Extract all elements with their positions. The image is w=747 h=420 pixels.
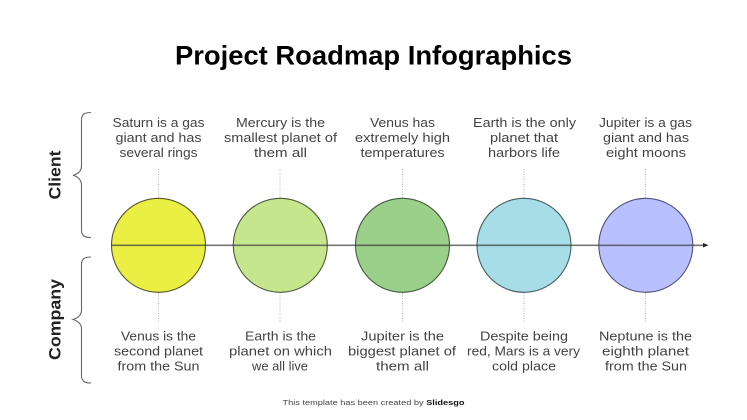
bottom text 1: from the Sun	[118, 358, 200, 374]
top text 3: Venus has	[370, 115, 436, 130]
label: Company: Company	[46, 278, 64, 360]
top text 3: extremely high	[355, 130, 450, 145]
bottom text 4: red, Mars is a very	[467, 344, 581, 358]
circle: periwinkle	[599, 198, 693, 292]
top text 5	[599, 115, 693, 160]
top text 1: Saturn is a gas	[112, 115, 205, 130]
top text 3	[355, 115, 450, 160]
top text 4: planet that	[490, 130, 558, 145]
bottom text 5: eighth planet	[602, 344, 689, 358]
label: Client: Client	[46, 150, 64, 200]
bottom text 1: second planet	[114, 344, 203, 358]
bottom text 2: we all live	[251, 358, 308, 374]
bottom text 1: Venus is the	[121, 328, 196, 344]
bottom text 1	[114, 328, 203, 374]
top text 5: giant and has	[603, 130, 690, 145]
bottom text 3: Jupiter is the	[361, 328, 444, 344]
brace: Company	[73, 257, 91, 383]
top text 4: harbors life	[488, 145, 560, 160]
bottom text 2: planet on which	[229, 344, 332, 358]
bottom text 2	[229, 328, 332, 374]
top text 1	[112, 115, 205, 160]
circle: green	[356, 198, 450, 292]
bottom text 3	[348, 328, 456, 374]
top text 2: Mercury is the	[236, 115, 325, 130]
brace: Client	[73, 112, 91, 238]
timeline arrow	[112, 243, 708, 248]
bottom text 4	[467, 328, 581, 374]
bottom text 5: Neptune is the	[599, 328, 692, 344]
top text 5: eight moons	[606, 145, 687, 160]
circle: light green	[233, 198, 327, 292]
top text 4	[473, 115, 577, 160]
top text 2	[224, 115, 337, 160]
bottom text 5	[599, 328, 692, 374]
top text 4: Earth is the only	[473, 115, 577, 130]
top text 5: Jupiter is a gas	[599, 115, 693, 130]
bottom text 4: Despite being	[480, 328, 568, 344]
top text 2: them all	[254, 145, 307, 160]
bottom text 2: Earth is the	[245, 328, 316, 344]
top text 1: several rings	[120, 145, 198, 160]
title: Project Roadmap Infographics	[175, 40, 572, 70]
bottom connector lines	[158, 293, 646, 322]
bottom text 3: them all	[376, 358, 429, 374]
top text 1: giant and has	[116, 130, 202, 145]
footer credit: This template has been created by Slidesgo	[282, 398, 465, 407]
bottom text 4: cold place	[492, 358, 556, 374]
circle: yellow	[112, 198, 206, 292]
bottom text 5: from the Sun	[605, 358, 687, 374]
bottom text 3: biggest planet of	[348, 344, 456, 358]
circle: light blue	[477, 198, 571, 292]
top connector lines	[158, 169, 646, 198]
top text 3: temperatures	[360, 145, 445, 160]
top text 2: smallest planet of	[224, 130, 337, 145]
